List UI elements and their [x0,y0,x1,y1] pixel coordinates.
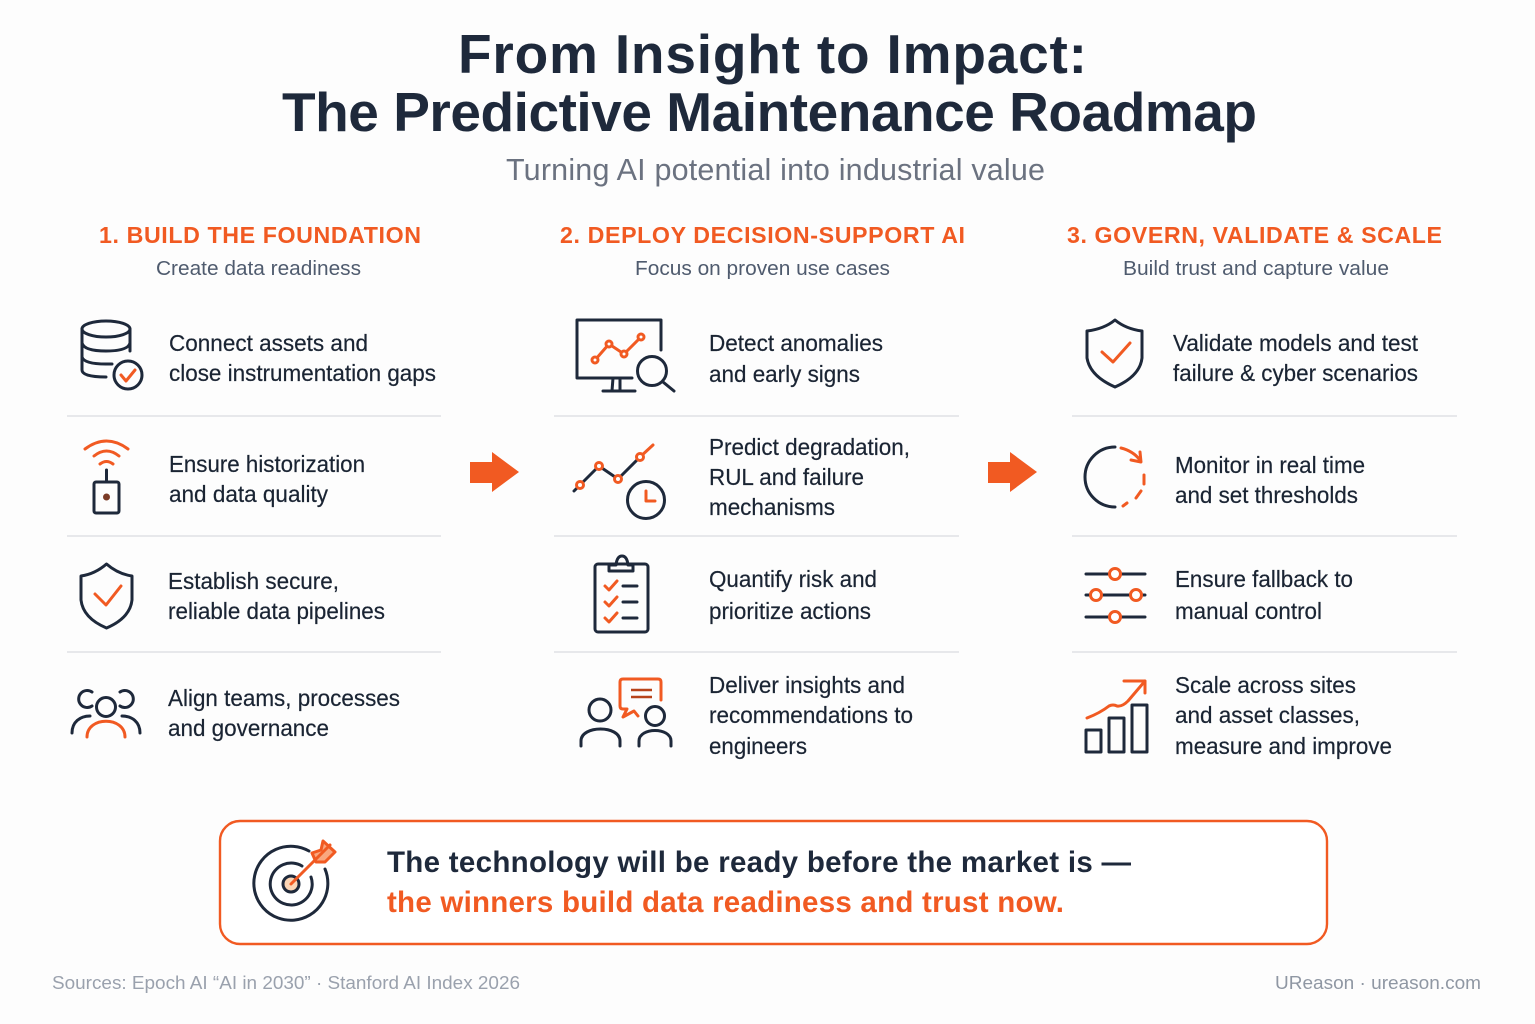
callout text [387,846,1132,919]
text: validate models: Validate models and test [1173,330,1418,356]
heading: 1. BUILD THE FOUNDATION [99,222,421,248]
panel: deploy decision-support AI [554,222,965,759]
icon: team [72,690,140,737]
text: deliver insights: engineers [709,733,807,759]
panel: govern, validate and scale [1067,222,1457,759]
text: scale [1175,672,1392,759]
subheading: Build trust and capture value [1123,258,1389,280]
icon: shield [81,564,132,628]
text: align teams: and governance [168,715,329,741]
icon: engineers with speech bubble [581,679,671,746]
icon: sliders [1086,568,1145,622]
text: pipelines: Establish secure, [168,568,339,594]
text: historization: Ensure historization [169,451,365,477]
text: detect anomalies: Detect anomalies [709,330,883,356]
arrow: step 1 to step 2 [470,452,519,492]
panel: build the foundation [67,222,441,741]
text: deliver insights [709,672,913,759]
icon: trend with clock [574,445,664,518]
text: scale: Scale across sites [1175,672,1356,698]
subheading: Create data readiness [156,258,361,280]
text: deliver insights: recommendations to [709,702,913,728]
icon: shield check [1087,320,1142,387]
text: detect anomalies: and early signs [709,361,860,387]
text: quantify risk: prioritize actions [709,598,871,624]
text: predict degradation: mechanisms [709,494,835,520]
text: historization: and data quality [169,481,328,507]
text: deliver insights: Deliver insights and [709,672,905,698]
text: connect assets [169,330,436,386]
text: validate models [1173,330,1418,386]
text: fallback: Ensure fallback to [1175,566,1353,592]
text: detect anomalies [709,330,883,387]
title: The Predictive Maintenance Roadmap [282,81,1257,143]
text: pipelines: reliable data pipelines [168,598,385,624]
text: connect assets: close instrumentation gaps [169,360,436,386]
callout text: the winners build data readiness and trust now. [387,886,1064,919]
subtitle: Turning AI potential into industrial value [506,153,1045,187]
icon: target with arrow [254,841,335,920]
credit: UReason · ureason.com [1275,972,1481,993]
text: validate models: failure & cyber scenarios [1173,360,1418,386]
icon: monitor with magnifier [577,320,674,391]
text: align teams: Align teams, processes [168,685,400,711]
callout text: The technology will be ready before the market is — [387,846,1132,879]
icon: growth chart [1086,681,1147,752]
icon: monitoring loop [1085,447,1144,507]
arrow: step 2 to step 3 [988,452,1037,492]
text: pipelines [168,568,385,624]
subheading: Focus on proven use cases [635,258,890,280]
text: monitor: Monitor in real time [1175,452,1365,478]
text: fallback: manual control [1175,598,1322,624]
text: predict degradation [709,434,910,520]
text: quantify risk [709,566,877,624]
text: scale: and asset classes, [1175,702,1360,728]
title: From Insight to Impact: [458,23,1087,85]
title [282,23,1257,143]
heading: 3. GOVERN, VALIDATE & SCALE [1067,222,1442,248]
icon: database with check [82,321,142,389]
text: fallback [1175,566,1353,624]
text: scale: measure and improve [1175,733,1392,759]
text: predict degradation: RUL and failure [709,464,864,490]
text: monitor [1175,452,1365,508]
text: historization [169,451,365,507]
text: predict degradation: Predict degradation, [709,434,910,460]
icon: clipboard checklist [595,556,648,632]
sources: Sources: Epoch AI “AI in 2030” · Stanford AI Index 2026 [52,972,520,993]
callout [220,821,1327,944]
text: align teams [168,685,400,741]
text: monitor: and set thresholds [1175,482,1358,508]
heading: 2. DEPLOY DECISION-SUPPORT AI [560,222,965,248]
icon: wireless sensor [85,441,128,513]
text: quantify risk: Quantify risk and [709,566,877,592]
text: connect assets: Connect assets and [169,330,368,356]
